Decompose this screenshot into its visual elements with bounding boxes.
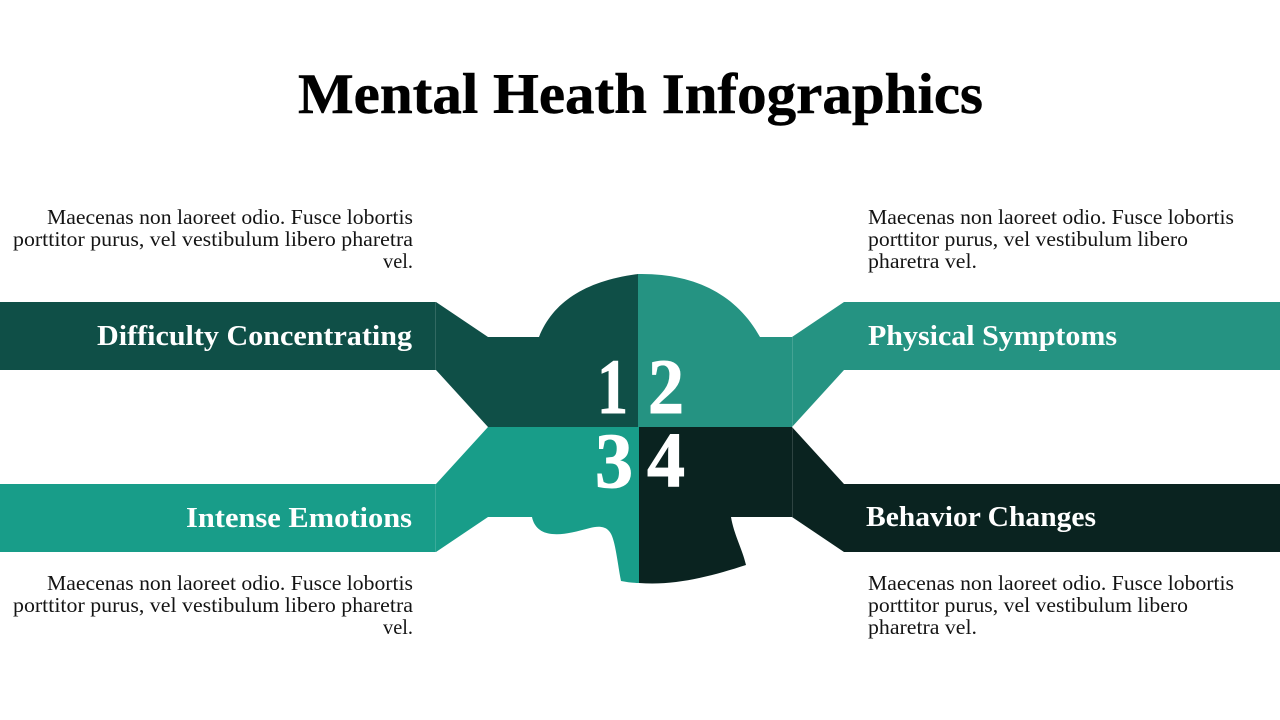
description 1 <box>13 205 413 273</box>
number 1: 1 <box>597 343 628 430</box>
title: Mental Heath Infographics <box>298 63 983 126</box>
description 2 <box>868 205 1234 273</box>
description 1: Maecenas non laoreet odio. Fusce lobortis <box>47 205 413 229</box>
heading: difficulty concentrating: Difficulty Concentrating <box>97 321 412 352</box>
panel: intense emotions <box>0 427 639 639</box>
description 1: porttitor purus, vel vestibulum libero pharetra <box>13 227 413 251</box>
description 2: porttitor purus, vel vestibulum libero <box>868 227 1188 251</box>
description 4: Maecenas non laoreet odio. Fusce lobortis <box>868 571 1234 595</box>
description 4 <box>868 571 1234 639</box>
description 4: pharetra vel. <box>868 615 977 639</box>
quadrant 3 shape <box>0 427 639 583</box>
heading: physical symptoms: Physical Symptoms <box>868 321 1117 352</box>
number 4: 4 <box>647 416 685 503</box>
description 3: vel. <box>383 615 413 639</box>
quadrant 1 shape <box>0 274 638 427</box>
heading: intense emotions: Intense Emotions <box>186 503 412 534</box>
quadrant 4 shape <box>639 427 1280 584</box>
description 3: porttitor purus, vel vestibulum libero pharetra <box>13 593 413 617</box>
number 2: 2 <box>648 343 684 430</box>
description 3 <box>13 571 413 639</box>
description 3: Maecenas non laoreet odio. Fusce lobortis <box>47 571 413 595</box>
description 1: vel. <box>383 249 413 273</box>
panel: physical symptoms <box>638 205 1280 427</box>
description 2: pharetra vel. <box>868 249 977 273</box>
number 3: 3 <box>595 417 633 504</box>
description 2: Maecenas non laoreet odio. Fusce lobortis <box>868 205 1234 229</box>
description 4: porttitor purus, vel vestibulum libero <box>868 593 1188 617</box>
panel: difficulty concentrating <box>0 205 638 427</box>
heading: behavior changes: Behavior Changes <box>866 502 1096 533</box>
quadrant 2 shape <box>638 274 1280 427</box>
panel: behavior changes <box>639 427 1280 639</box>
